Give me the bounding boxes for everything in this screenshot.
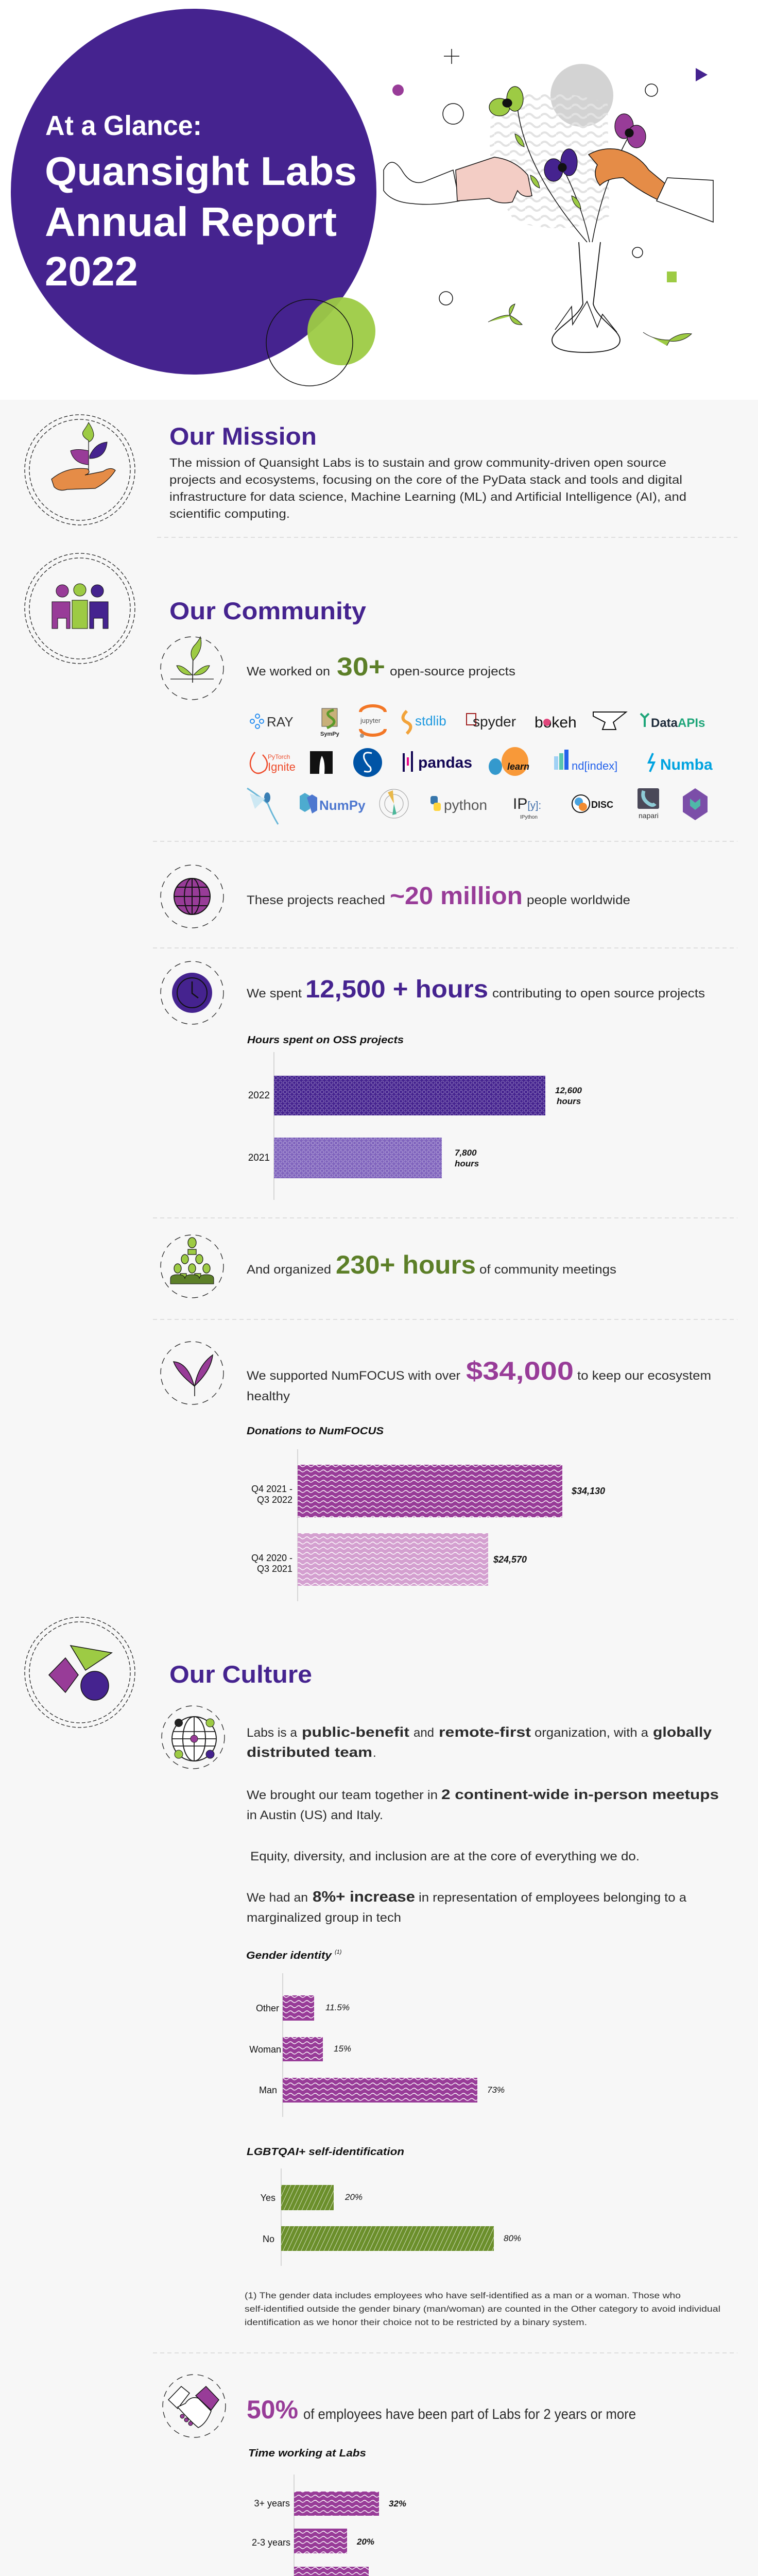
panel: culture (25, 1617, 720, 2327)
bar chart: LGBTQAI+: Yes (261, 2193, 275, 2203)
text: $34,000: We supported NumFOCUS with over (247, 1369, 460, 1383)
bar chart: gender identity: 73% (487, 2085, 505, 2095)
bar chart: LGBTQAI+: LGBTQAI+ self-identification (247, 2146, 404, 2158)
text: 20 million (247, 883, 630, 910)
logos grid: DataAPIs (651, 716, 705, 730)
footnote (245, 2291, 720, 2327)
heading: Our Community: Our Community (169, 597, 366, 624)
logos grid: IP[y]: (513, 795, 541, 812)
footnote: (1) The gender data includes employees who have self-identified as a man or a woman. Those who (245, 2291, 681, 2300)
text: 50% (247, 2395, 636, 2424)
logos grid: SymPy (320, 731, 340, 737)
bar chart: hours spent on OSS projects: 7,800 (455, 1148, 477, 1158)
icon: three people (25, 553, 135, 664)
text: public benefit: globally (653, 1724, 712, 1740)
text: public benefit: Labs is a (247, 1726, 298, 1740)
text: 230+ hours (247, 1250, 616, 1279)
logos grid: PyTorch (268, 753, 290, 760)
logos grid: NumPy (319, 798, 366, 813)
icon: clock (161, 961, 223, 1024)
bar chart: hours spent on OSS projects: hours (557, 1096, 581, 1106)
header illustration: hands with flowers and vase (384, 49, 713, 352)
text: 20 million: ~20 million (390, 883, 523, 910)
bar chart: gender identity: 11.5% (325, 2003, 350, 2012)
text: 8% increase: We had an (247, 1891, 308, 1905)
bar chart: hours spent on OSS projects: Hours spent on OSS projects (247, 1035, 404, 1046)
logos grid: Ignite (268, 760, 296, 773)
bar chart: time working at Labs: 2-3 years (252, 2537, 290, 2548)
logos grid: DISC (591, 800, 613, 810)
text: 20 million: people worldwide (527, 893, 630, 907)
text: 50%: 50% (247, 2395, 298, 2424)
bar chart: donations to NumFOCUS: Donations to NumFOCUS (247, 1426, 384, 1437)
text: meetups: 2 continent-wide in-person meetups (441, 1787, 719, 1802)
text: 230+ hours: And organized (247, 1263, 331, 1277)
bar chart: hours spent on OSS projects: 12,600 (555, 1086, 582, 1095)
bar chart: donations to NumFOCUS: Q4 2021 - (251, 1484, 292, 1494)
vase (552, 242, 620, 352)
text: public benefit: organization, with a (535, 1726, 649, 1740)
icon: globe (161, 865, 223, 928)
bar chart: gender identity: (1) (335, 1949, 342, 1955)
text: 30+ projects: 30+ (337, 652, 385, 681)
stems (518, 108, 627, 242)
text: equity: Equity, diversity, and inclusion are at the core of everything we do. (250, 1850, 640, 1863)
bar chart: LGBTQAI+: 80% (504, 2233, 521, 2243)
icon: leaves (161, 1342, 223, 1404)
text: 30+ projects (247, 652, 515, 681)
right hand (589, 149, 667, 200)
panel: meetings (161, 1235, 616, 1298)
bar chart: donations to NumFOCUS: Q3 2022 (257, 1495, 292, 1505)
bar chart: gender identity: Woman (249, 2044, 281, 2055)
heading: Our Culture: Our Culture (169, 1660, 312, 1688)
logos grid: stdlib (415, 713, 446, 728)
panel: tenure (163, 2375, 636, 2576)
bar chart: LGBTQAI+: 20% (344, 2192, 363, 2202)
logos grid: learn (507, 761, 529, 772)
bar chart: gender identity: Gender identity (246, 1950, 332, 1961)
text: public benefit: public-benefit (302, 1724, 409, 1740)
text: 12,500 hours: We spent (247, 987, 302, 1001)
bar chart: time working at Labs (248, 2448, 406, 2576)
text: 20 million: These projects reached (247, 893, 385, 907)
text: 8% increase: 8%+ increase (313, 1889, 415, 1905)
icon: meeting people (161, 1235, 223, 1298)
text: public benefit (247, 1724, 712, 1760)
text: public benefit: remote-first (439, 1724, 531, 1740)
panel: mission (25, 415, 686, 525)
text: 30+ projects: open-source projects (390, 665, 515, 679)
text: public benefit: distributed team (247, 1744, 372, 1760)
icon: globe with team dots (162, 1706, 225, 1769)
panel: community (25, 553, 713, 824)
logos grid: bokeh (535, 714, 577, 731)
text: public benefit: . (373, 1746, 376, 1760)
text: public benefit: and (414, 1726, 434, 1740)
bar chart: donations to NumFOCUS (247, 1426, 605, 1601)
bar chart: donations to NumFOCUS: Q3 2021 (257, 1564, 292, 1574)
bar chart: gender identity: Man (259, 2085, 277, 2095)
logos grid: pandas (418, 754, 472, 771)
footnote: self-identified outside the gender binary (man/woman) are counted in the Other category to avoid individual (245, 2304, 720, 2314)
text: 230+ hours: of community meetings (479, 1263, 616, 1277)
bar chart: hours spent on OSS projects: 2021 (248, 1153, 270, 1163)
bar chart: time working at Labs: 20% (356, 2537, 374, 2547)
icon: sprout (161, 637, 223, 700)
logos grid: Numba (660, 756, 713, 773)
title: 2022 (45, 248, 138, 294)
logos grid: spyder (473, 714, 516, 730)
header decorative circles (266, 297, 375, 386)
logos grid: python (444, 797, 487, 813)
title: Annual Report (45, 199, 337, 245)
logos grid: napari (639, 811, 659, 820)
header background (0, 0, 758, 400)
text: meetups: We brought our team together in (247, 1788, 438, 1802)
text: 12,500 hours (247, 976, 705, 1003)
bar chart: donations to NumFOCUS: Q4 2020 - (251, 1553, 292, 1563)
left hand (384, 162, 459, 205)
text: $34,000: to keep our ecosystem (577, 1369, 711, 1383)
footnote: identification as we honor their choice not to be restricted by a binary system. (245, 2317, 587, 2327)
falling leaves (488, 304, 522, 325)
text: $34,000 (247, 1357, 711, 1403)
panel: reach (161, 865, 630, 928)
bar chart: hours spent on OSS projects: hours (455, 1159, 479, 1168)
logos grid: nd[index] (572, 759, 617, 772)
text: 230+ hours: 230+ hours (336, 1250, 476, 1279)
panel: hours (161, 961, 705, 1200)
heading: Our Mission: Our Mission (169, 422, 317, 450)
text: mission statement: infrastructure for data science, Machine Learning (ML) and Artificial Intelligence (AI), and (169, 490, 686, 503)
icon: hand holding plant (25, 415, 135, 525)
bar chart: hours spent on OSS projects: 2022 (248, 1090, 270, 1101)
bar chart: gender identity: 15% (334, 2044, 351, 2054)
text: $34,000: healthy (247, 1389, 290, 1403)
icon: handshake (163, 2375, 226, 2437)
bar chart: time working at Labs: 32% (389, 2499, 406, 2509)
text: 12,500 hours: contributing to open source projects (492, 987, 705, 1001)
bar chart: time working at Labs: 3+ years (254, 2498, 290, 2509)
panel: NumFOCUS donations (161, 1342, 711, 1601)
text: 50%: of employees have been part of Labs for 2 years or more (303, 2406, 636, 2422)
text: 30+ projects: We worked on (247, 665, 330, 679)
text: mission statement: projects and ecosystems, focusing on the core of the PyData stack and tools and digital (169, 473, 682, 486)
bar chart: gender identity (246, 1949, 505, 2117)
text: mission statement: scientific computing. (169, 507, 290, 520)
title: Quansight Labs (45, 148, 357, 194)
title (45, 110, 357, 294)
text: mission statement (169, 456, 686, 520)
bar chart: hours spent on OSS projects (247, 1035, 582, 1200)
logos grid (247, 706, 713, 824)
header title circle (11, 9, 376, 375)
icon: shapes (25, 1617, 135, 1727)
bar chart: donations to NumFOCUS: $34,130 (571, 1486, 605, 1496)
text: $34,000: $34,000 (466, 1357, 574, 1385)
bar chart: gender identity: Other (256, 2003, 279, 2013)
bar chart: LGBTQAI+: No (263, 2234, 274, 2244)
text: meetups (247, 1787, 719, 1822)
logos grid: IPython (520, 815, 538, 820)
title: At a Glance: (45, 110, 202, 141)
text: 12,500 hours: 12,500 + hours (305, 976, 488, 1003)
text: 8% increase: in representation of employees belonging to a (419, 1891, 687, 1905)
bar chart: donations to NumFOCUS: $24,570 (493, 1554, 527, 1565)
text: 8% increase (247, 1889, 687, 1925)
flowers (489, 87, 646, 181)
logos grid: RAY (267, 714, 294, 730)
logos grid: jupyter (360, 717, 381, 724)
bar chart: time working at Labs: Time working at Labs (248, 2448, 366, 2459)
bar chart: LGBTQAI+ (247, 2146, 521, 2266)
text: meetups: in Austin (US) and Italy. (247, 1808, 383, 1822)
text: mission statement: The mission of Quansight Labs is to sustain and grow community-driven open source (169, 456, 666, 469)
text: 8% increase: marginalized group in tech (247, 1911, 401, 1925)
